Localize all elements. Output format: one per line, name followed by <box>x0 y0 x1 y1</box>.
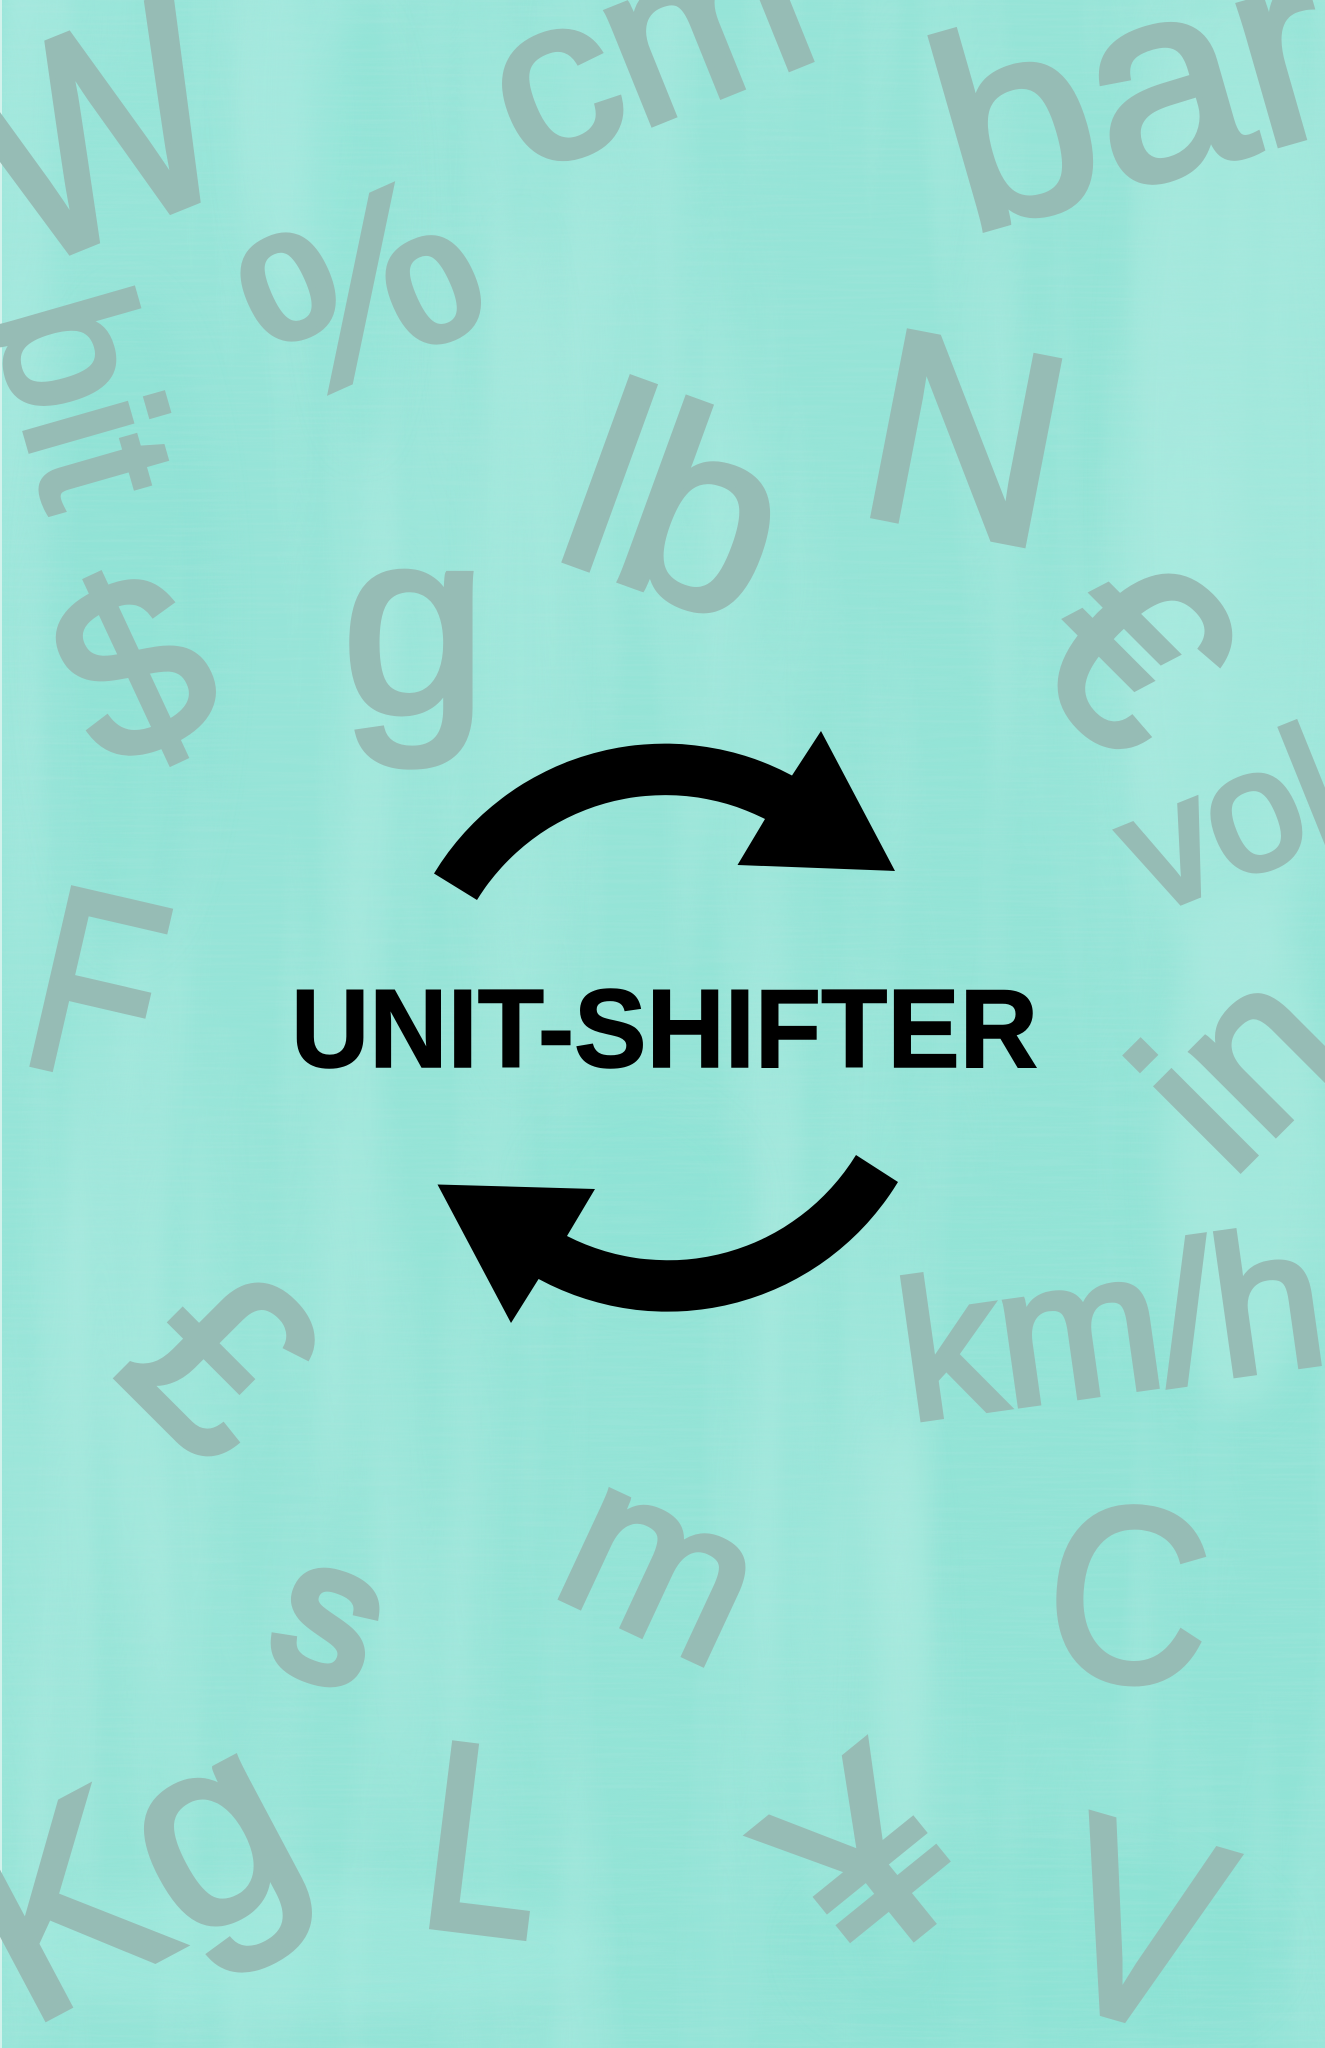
arrow: top, pointing right <box>434 731 895 900</box>
unit: m: m <box>528 1410 800 1713</box>
unit: L: L <box>410 1688 558 1992</box>
title: UNIT-SHIFTER <box>291 967 1038 1091</box>
unit: euro: € <box>980 497 1290 806</box>
unit: yen: ¥ <box>710 1695 1018 2024</box>
unit: lb: lb <box>529 327 827 679</box>
unit: pound: £ <box>73 1209 375 1511</box>
unit: km/h: km/h <box>886 1186 1325 1462</box>
unit: dollar: $ <box>12 511 255 822</box>
unit: F: F <box>4 830 191 1143</box>
arrow: bottom, pointing left <box>438 1155 898 1323</box>
unit: C: C <box>1039 1451 1219 1739</box>
unit: g: g <box>342 476 487 769</box>
unit: percent: % <box>203 122 519 455</box>
unit: N: N <box>841 270 1092 606</box>
unit: s: s <box>248 1493 415 1732</box>
